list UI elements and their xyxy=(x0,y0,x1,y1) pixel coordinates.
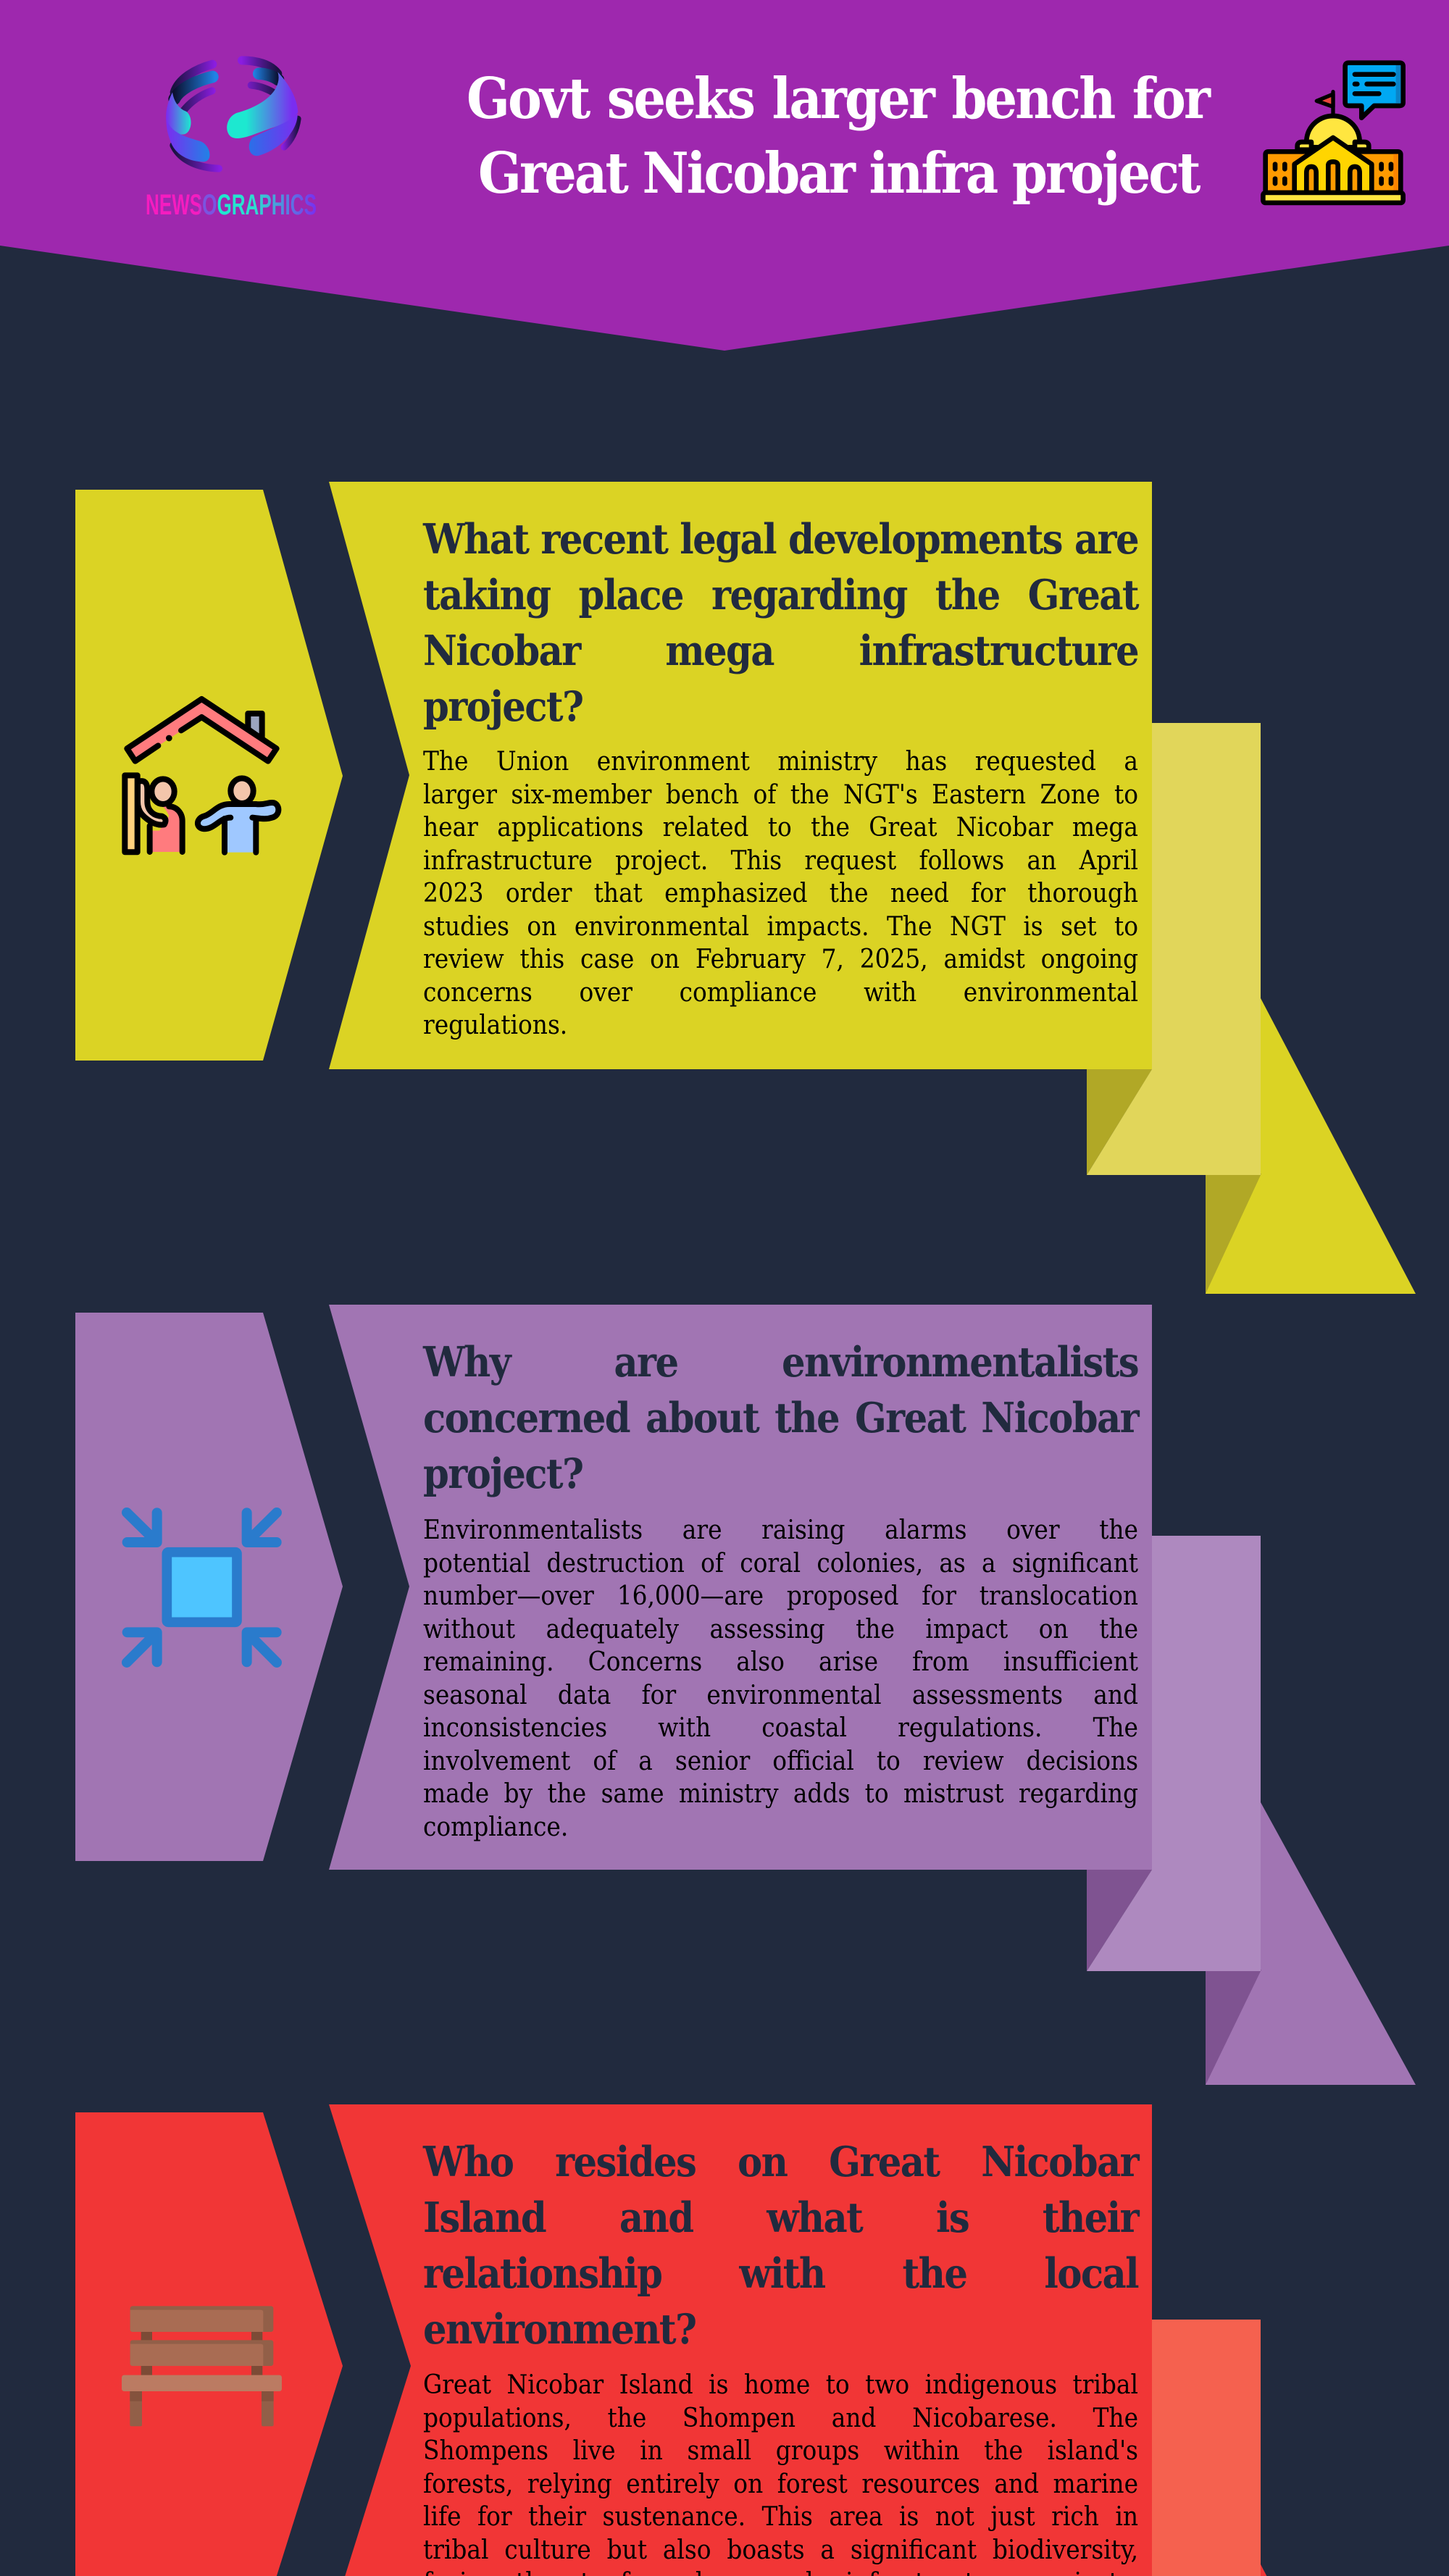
heading: section 3: relationship with the local xyxy=(423,2249,1138,2298)
body text: section 1 xyxy=(423,745,1138,1040)
body text: section 1: 2023 order that emphasized the need for thorough xyxy=(423,877,1138,908)
body text: section 3: populations, the Shompen and Nicobarese. The xyxy=(423,2402,1138,2433)
folded ribbon: section 1 xyxy=(1087,723,1416,1294)
folded ribbon: section 2 xyxy=(1087,1536,1416,2085)
body text: section 1: The Union environment ministry has requested a xyxy=(423,745,1138,777)
section 1: legal developments xyxy=(75,482,1416,1294)
heading: section 1: Nicobar mega infrastructure xyxy=(423,627,1138,675)
body text: section 2: number—over 16,000—are proposed for translocation xyxy=(423,1580,1138,1611)
section 2: environmental concerns xyxy=(75,1305,1416,2085)
heading: section 2 xyxy=(423,1338,1140,1498)
body text: section 2: made by the same ministry adds to mistrust regarding xyxy=(423,1778,1138,1809)
body text: section 2: without adequately assessing the impact on the xyxy=(423,1613,1138,1644)
heading: section 3: Who resides on Great Nicobar xyxy=(423,2138,1138,2186)
body text: section 2: involvement of a senior official to review decisions xyxy=(423,1744,1138,1776)
arrow panel: section 1 icon holder xyxy=(75,490,343,1061)
heading: section 2: project? xyxy=(423,1450,582,1498)
body text: section 2: compliance. xyxy=(423,1811,568,1841)
heading: section 3: environment? xyxy=(423,2305,696,2354)
icon: compress arrows and square xyxy=(127,1513,277,1663)
folded ribbon: section 3 xyxy=(1152,2320,1416,2576)
arrow panel: section 3 icon holder xyxy=(75,2112,343,2576)
body text: section 2: inconsistencies with coastal regulations. The xyxy=(423,1712,1138,1743)
body text: section 3 xyxy=(423,2369,1138,2576)
heading: section 2: concerned about the Great Nicobar xyxy=(423,1394,1138,1442)
heading: section 2: Why are environmentalists xyxy=(423,1338,1138,1387)
body text: section 2: seasonal data for environmental assessments and xyxy=(423,1679,1138,1710)
body text: section 3: Great Nicobar Island is home to two indigenous tribal xyxy=(423,2369,1138,2400)
body text: section 1: review this case on February 7, 2025, amidst ongoing xyxy=(423,943,1138,974)
section 3: residents of Great Nicobar xyxy=(75,2104,1266,2576)
icon: bench xyxy=(122,2306,282,2426)
body text: section 1: studies on environmental impacts. The NGT is set to xyxy=(423,910,1138,942)
title xyxy=(467,66,1211,206)
heading: section 1: project? xyxy=(423,682,582,731)
body text: section 2 xyxy=(423,1514,1138,1841)
body text: section 1: regulations. xyxy=(423,1009,567,1040)
body text: section 1: hear applications related to the Great Nicobar mega xyxy=(423,811,1138,842)
arrow panel: section 2 icon holder xyxy=(75,1313,343,1861)
heading: section 3: Island and what is their xyxy=(423,2194,1138,2242)
heading: section 1: What recent legal developments are xyxy=(423,515,1138,564)
heading: section 3 xyxy=(423,2138,1140,2354)
body text: section 2: remaining. Concerns also arise from insufficient xyxy=(423,1646,1138,1677)
body text: section 3: tribal culture but also boasts a significant biodiversity, xyxy=(423,2534,1138,2564)
title: Govt seeks larger bench for xyxy=(467,66,1208,132)
heading: section 1: taking place regarding the Great xyxy=(423,571,1138,619)
body text: section 2: Environmentalists are raising alarms over the xyxy=(423,1514,1138,1545)
text panel: section 1 xyxy=(329,482,1152,1069)
body text: section 3: forests, relying entirely on forest resources and marine xyxy=(423,2467,1138,2499)
body text: section 2: potential destruction of coral colonies, as a significant xyxy=(423,1547,1138,1578)
body text: section 1: concerns over compliance with environmental xyxy=(423,977,1138,1007)
text panel: section 3 xyxy=(329,2104,1152,2576)
body text: section 1: infrastructure project. This request follows an April xyxy=(423,845,1138,875)
heading: section 1 xyxy=(423,515,1139,731)
body text: section 1: larger six-member bench of the NGT's Eastern Zone to xyxy=(423,778,1138,810)
header banner xyxy=(0,0,1449,351)
logo: Newsographics xyxy=(146,56,317,221)
text panel: section 2 xyxy=(329,1305,1152,1870)
body text: section 3: life for their sustenance. This area is not just rich in xyxy=(423,2501,1138,2532)
icon: government building with speech bubble xyxy=(1261,60,1406,206)
title: Great Nicobar infra project xyxy=(478,141,1199,206)
icon: people and house xyxy=(125,699,278,853)
body text: section 3: Shompens live in small groups within the island's xyxy=(423,2435,1138,2466)
